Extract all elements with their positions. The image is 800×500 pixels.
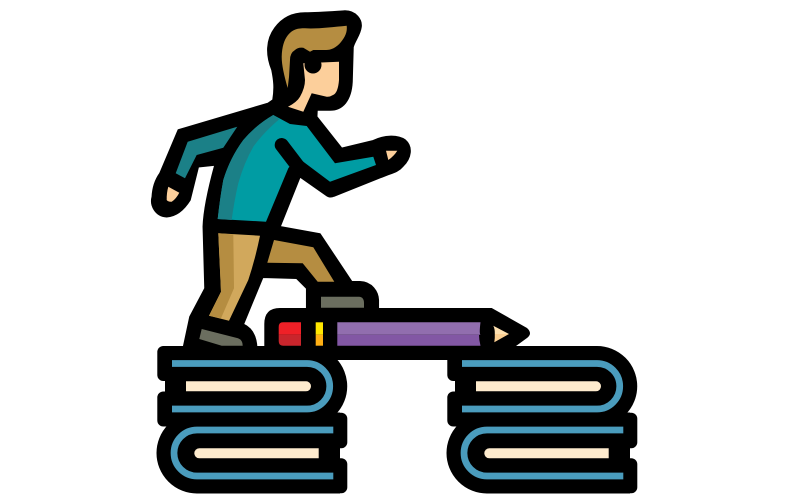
shirt torso and front arm xyxy=(218,115,376,222)
bottom book, right stack xyxy=(464,413,637,493)
ear xyxy=(304,56,322,74)
bottom book, left stack xyxy=(174,413,347,493)
top book, right stack xyxy=(447,346,620,426)
back arm sleeve xyxy=(176,127,237,178)
hair xyxy=(282,26,347,88)
right book stack xyxy=(447,346,637,493)
back leg trousers xyxy=(209,233,260,321)
back shoe xyxy=(199,329,243,346)
front leg trousers xyxy=(267,240,334,282)
front shoe xyxy=(321,297,364,308)
back leg shadow xyxy=(209,233,234,318)
face and neck xyxy=(288,62,339,112)
left hand xyxy=(167,187,179,202)
left book stack xyxy=(157,346,347,493)
person xyxy=(152,11,410,348)
pencil bridge xyxy=(264,308,530,360)
shirt shadow xyxy=(218,115,279,220)
arm outline stroke xyxy=(282,145,300,169)
right hand xyxy=(386,151,397,160)
top book, left stack xyxy=(157,346,330,426)
black silhouette of person xyxy=(152,11,410,348)
